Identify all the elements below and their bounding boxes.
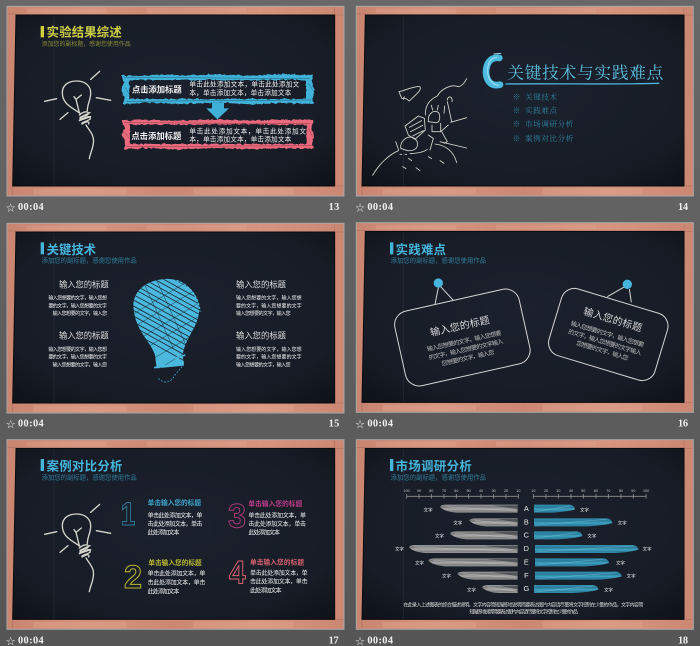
illustration: chalk city on a globe: [373, 79, 467, 175]
callout: blue box: 本，单击添加文本，单击添加文本: [189, 88, 292, 97]
item 1: 1: [121, 495, 135, 532]
footer: ☆: [355, 203, 365, 213]
contents list: ※: [513, 120, 520, 129]
bar labels: 文字: [643, 545, 652, 552]
footer: 14: [678, 202, 688, 213]
callout: blue box: 点击添加标题: [132, 85, 182, 95]
item 4: 单击输入您的标题: [250, 557, 304, 566]
item 2: 击此处添加文本，单击: [148, 578, 205, 586]
right text block 1: [236, 279, 302, 317]
callout: pink box: [121, 119, 314, 149]
callout: blue box: [121, 74, 314, 104]
right text block 2: [236, 331, 302, 368]
right text block 2: 输入您想要的文字，输入您: [236, 361, 291, 368]
left text block 1: 要的文字，输入您想要的文字: [48, 302, 107, 309]
axis right: 70: [606, 489, 610, 493]
underline: [505, 81, 659, 86]
category letters: A: [524, 504, 529, 513]
item 3: 此处添加文本: [248, 529, 280, 537]
bar labels: 文字: [587, 533, 597, 540]
icon: light bulb: [45, 71, 111, 159]
hanging card right: 的文字，输入您想要的文字输入: [567, 328, 642, 357]
axis right: 40: [569, 489, 573, 493]
right text block 1: 输入您想要的文字，输入您想: [236, 295, 302, 302]
axis left: 20: [504, 489, 508, 493]
axis left: 70: [442, 489, 446, 493]
axis left: 40: [479, 489, 483, 493]
footer: [6, 202, 339, 213]
axis left: 60: [454, 489, 458, 493]
category letters: [523, 504, 530, 593]
blackboard frame: [356, 440, 693, 629]
heading: 实验结果综述: [47, 25, 122, 40]
right text block 2: 要的文字，输入您想要的文字: [236, 354, 302, 361]
left text block 2: 输入您想要的文字，输入您: [53, 361, 107, 368]
bar labels: 文字: [395, 545, 404, 552]
panel: slide 15 key technology: [6, 223, 344, 430]
category letters: F: [524, 571, 529, 580]
axis right: [531, 489, 649, 499]
footer: [355, 202, 688, 213]
bar labels: [395, 506, 652, 593]
axis right: 80: [619, 489, 623, 493]
right text block 2: 输入您的标题: [236, 331, 287, 341]
axis left: 80: [429, 489, 433, 493]
item 3: 击此处添加文本，单击: [248, 520, 306, 528]
category letters: E: [524, 558, 529, 567]
footer: [355, 419, 688, 430]
category letters: C: [524, 531, 530, 540]
axis left: 10: [516, 489, 520, 493]
hanging card right: 您想要的文字，输入您: [575, 339, 629, 362]
axis right: 30: [556, 489, 560, 493]
item 1: 单击此处添加文本，单: [148, 511, 202, 519]
left text block 1: 输入您的标题: [59, 279, 109, 289]
bar labels: 文字: [424, 506, 433, 513]
item 4: 击此处添加文本，单击: [250, 578, 308, 586]
bar labels: 文字: [467, 586, 476, 593]
axis left: 90: [417, 489, 421, 493]
category letters: B: [524, 517, 529, 526]
blackboard frame: [7, 6, 344, 196]
contents list: 关键技术: [525, 91, 557, 101]
footer: 16: [678, 419, 688, 430]
footer: 13: [329, 202, 339, 213]
contents list: ※: [513, 106, 520, 115]
right text block 1: 要的文字，输入您想要的文字: [236, 302, 302, 309]
heading: [41, 25, 131, 48]
contents list: [513, 91, 574, 143]
heading: 案例对比分析: [47, 459, 122, 474]
item 4: 4: [229, 555, 246, 591]
heading: 市场调研分析: [396, 459, 472, 474]
heading: 添加您的副标题，感谢您使用作品: [391, 472, 486, 481]
item 4: 单击此处添加文本，单: [250, 569, 308, 577]
contents list: 市场调研分析: [525, 119, 574, 129]
left text block 1: [48, 279, 109, 317]
item 3: 单击此处添加文本，单: [248, 511, 306, 519]
footer: [6, 419, 339, 430]
left text block 2: 要的文字，输入您想要的文字: [48, 354, 107, 361]
contents list: 实践难点: [525, 105, 557, 115]
axis left: 100: [404, 489, 410, 493]
footer: 00:04: [367, 419, 393, 430]
icon: chalk letter C: [486, 53, 501, 85]
bar labels: 文字: [435, 533, 444, 540]
right text block 1: 输入您想要的文字，输入您: [236, 310, 291, 317]
left text block 1: 输入您想要的文字，输入您想: [48, 295, 107, 302]
axis right: 10: [531, 489, 535, 493]
bar labels: 文字: [618, 519, 627, 526]
blackboard frame: [356, 223, 693, 412]
right text block 1: 输入您的标题: [236, 279, 287, 289]
callout: pink box: 本，单击添加文本，单击添加文本: [189, 135, 292, 144]
item 3: [228, 498, 306, 537]
bar labels: 文字: [604, 586, 613, 593]
section title: 关键技术与实践难点: [507, 64, 664, 83]
footer: 15: [329, 419, 339, 430]
heading: 添加您的副标题，感谢您使用作品: [42, 472, 137, 481]
icon: light bulb: [45, 504, 111, 592]
bar labels: 文字: [442, 573, 451, 580]
contents list: ※: [513, 134, 520, 143]
item 2: 单击输入您的标题: [148, 558, 202, 567]
panel: slide 14 section title: [355, 6, 693, 213]
footer: 00:04: [367, 202, 393, 213]
blackboard frame: [356, 6, 693, 196]
description text: [403, 601, 643, 615]
hanging card left: 输入您的标题: [429, 313, 491, 339]
axis left: 30: [492, 489, 496, 493]
bar labels: 文字: [627, 573, 636, 580]
item 1: [121, 495, 202, 537]
bar chart left: grey bars: [409, 505, 518, 593]
right text block 2: 输入您想要的文字，输入您想: [236, 346, 302, 353]
description text: 在此录入上述图表的综合描述说明，文字内容简短凝练地说明简要表达图片内容请尽量将文字控制在少量的作品，文字内容简: [403, 601, 643, 608]
heading: 实践难点: [396, 242, 446, 257]
bar labels: 文字: [415, 559, 424, 566]
item 3: 单击输入您的标题: [248, 499, 303, 508]
bar labels: 文字: [616, 559, 625, 566]
axis right: 20: [544, 489, 548, 493]
item 1: 单击输入您的标题: [148, 498, 201, 507]
hanging card right: [545, 280, 671, 384]
hanging card right: 输入您想要的文字，输入您想要: [570, 319, 645, 349]
item 2: 2: [124, 558, 142, 595]
panel: slide 18 market research: [355, 440, 693, 646]
item 4: 此处添加文本: [250, 587, 282, 595]
arrow: [206, 103, 229, 119]
heading: [390, 459, 486, 481]
heading: [390, 242, 486, 265]
item 1: 此处添加文本: [148, 529, 179, 537]
left text block 2: [48, 331, 109, 368]
blackboard frame: [7, 440, 344, 629]
panel: slide 17 case comparison: [6, 440, 344, 646]
callout: pink box: 单击此处添加文本，单击此处添加文: [189, 126, 306, 135]
heading: [41, 459, 137, 481]
callout: pink box: 点击添加标题: [131, 131, 182, 141]
item 3: 3: [228, 498, 246, 536]
description text: 短凝练地说明简要表达图片内容请尽量将文字控制在少量的作品: [469, 608, 578, 615]
hanging card left: 输入您想要的文字，输入您想要: [426, 329, 502, 353]
footer: [6, 635, 339, 646]
axis left: [404, 489, 520, 499]
left text block 1: 输入您想要的文字，输入您: [53, 310, 107, 317]
hanging card left: 您想要的文字，输入您: [441, 348, 495, 368]
hanging card left: 的文字，输入您想要的文字输入: [428, 337, 504, 362]
panel: slide 16 practical difficulties: [355, 223, 693, 430]
bar labels: 文字: [453, 519, 463, 526]
hanging card right: 输入您的标题: [582, 305, 644, 334]
footer: ☆: [355, 420, 365, 430]
contents list: ※: [513, 92, 520, 101]
footer: [355, 635, 688, 646]
heading: 添加您的副标题，感谢您使用作品: [42, 256, 137, 265]
footer: 00:04: [18, 419, 44, 430]
footer: ☆: [6, 203, 15, 213]
heading: 添加您的副标题，感谢您使用作品: [42, 40, 131, 48]
heading: 添加您的副标题，感谢您使用作品: [391, 256, 486, 265]
icon: scribbled blue bulb: [133, 278, 201, 382]
item 2: [124, 558, 205, 595]
bar chart right: blue bars: [534, 505, 638, 593]
axis right: 60: [594, 489, 598, 493]
item 4: [229, 555, 308, 595]
category letters: D: [524, 544, 529, 553]
panel: slide 13 experiment results: [6, 6, 344, 213]
blackboard frame: [7, 223, 344, 413]
axis left: 50: [467, 489, 471, 493]
heading: 关键技术: [47, 242, 97, 257]
footer: ☆: [6, 420, 15, 430]
callout: blue box: 单击此处添加文本，单击此处添加文: [189, 80, 300, 89]
footer: 00:04: [18, 202, 44, 213]
axis right: 100: [643, 489, 649, 493]
bar labels: 文字: [580, 506, 589, 513]
heading: [41, 242, 137, 265]
left text block 2: 输入您想要的文字，输入您想: [48, 346, 107, 353]
hanging card left: [392, 278, 533, 389]
item 2: 单击此处添加文本，单: [148, 570, 205, 578]
axis right: 50: [581, 489, 585, 493]
item 1: 击此处添加文本，单击: [148, 520, 202, 528]
category letters: G: [523, 584, 529, 593]
contents list: 案例对比分析: [525, 133, 574, 143]
item 2: 此处添加文本: [148, 587, 179, 595]
axis right: 90: [631, 489, 635, 493]
left text block 2: 输入您的标题: [59, 331, 109, 341]
